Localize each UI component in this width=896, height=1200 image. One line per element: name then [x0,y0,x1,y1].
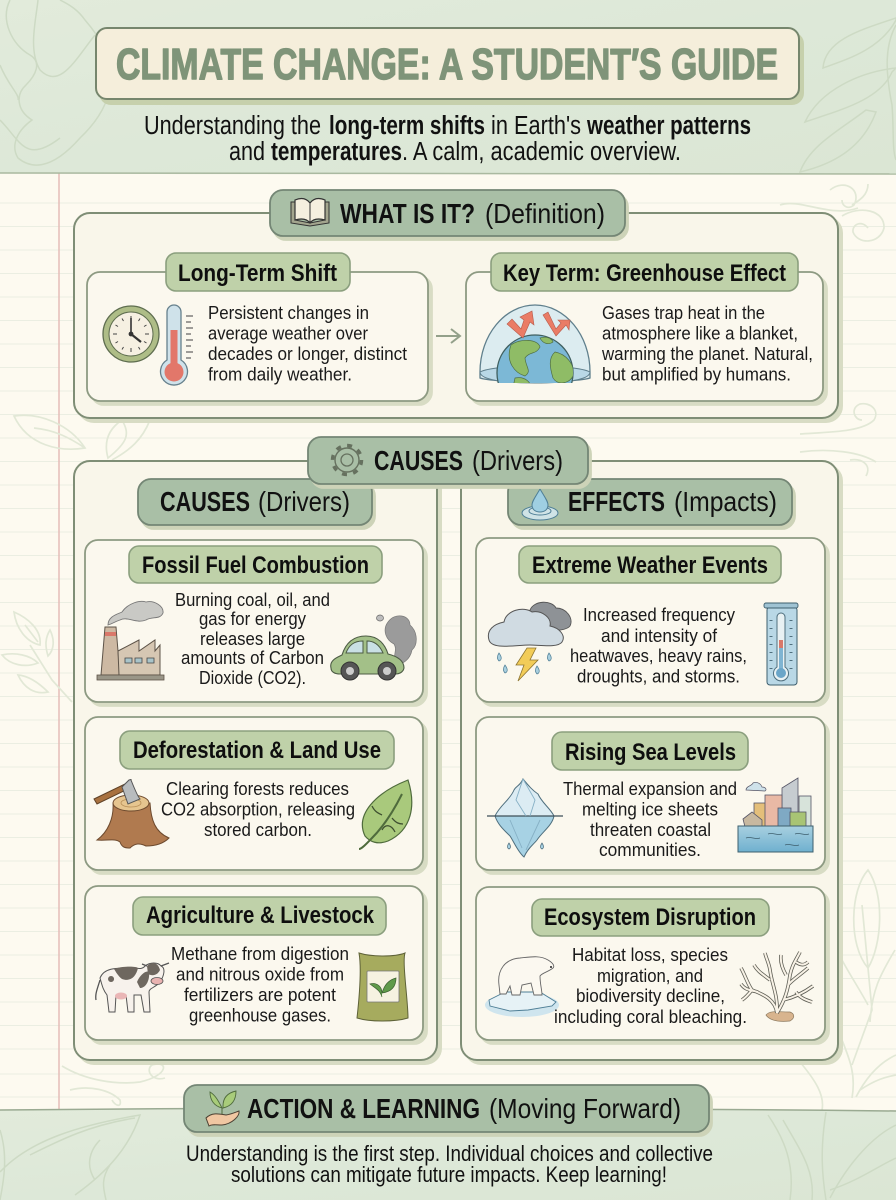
icon: sad leaf [359,780,412,849]
subtitle: . A calm, academic overview. [402,138,681,166]
text: long-term shift: Persistent changes in [208,302,369,323]
section heading: action and learning: ACTION & LEARNING [247,1093,480,1124]
subtitle: and [229,138,265,166]
card heading: long-term shift: Long-Term Shift [178,260,337,287]
text: rising sea levels: communities. [599,839,701,860]
section heading: action and learning: (Moving Forward) [489,1093,681,1124]
text: deforestation [161,778,355,840]
footer text: Understanding is the first step. Individual choices and collective [186,1141,713,1166]
text: ecosystem [554,944,747,1027]
text: ecosystem: migration, and [597,965,703,986]
section heading: what is it: WHAT IS IT? [340,198,475,229]
card heading: deforestation: Deforestation & Land Use [133,737,381,764]
text: rising sea levels: threaten coastal [590,819,711,840]
card heading: agriculture [133,897,386,935]
title box [96,28,799,99]
subtitle: temperatures [271,138,402,166]
card heading: rising sea levels [552,732,748,770]
subheading: causes: (Drivers) [258,486,350,517]
icon: iceberg [487,779,563,857]
section heading: what is it [270,190,625,236]
card: fossil fuel combustion [85,540,423,702]
subheading: effects: (Impacts) [674,486,777,517]
card heading: fossil fuel [129,546,382,583]
section heading: what is it: (Definition) [485,198,605,229]
text: greenhouse effect [601,302,813,384]
text: ecosystem: Habitat loss, species [572,944,728,965]
text: long-term shift: decades or longer, distinct [208,343,408,364]
card: deforestation [85,717,423,870]
text: rising sea levels: melting ice sheets [582,798,718,820]
icon: bleached coral [741,952,813,1021]
text: long-term shift: average weather over [208,322,368,344]
icon: car with exhaust [331,615,416,680]
text: greenhouse effect: atmosphere like a blanket, [602,322,798,344]
text: fossil fuel: amounts of Carbon [181,647,324,668]
text: fossil fuel: Dioxide (CO2). [199,667,306,688]
text: long-term shift [208,302,408,384]
text: deforestation: CO2 absorption, releasing [161,798,355,820]
icon: thermometer [160,305,193,385]
footer text [186,1141,713,1187]
subtitle: in Earth's [491,112,581,140]
subheading: causes: CAUSES [160,486,250,517]
card: rising sea levels [476,717,825,870]
card heading: long-term shift [166,253,350,291]
icon: storm cloud [488,602,571,681]
icon: open book [291,199,329,226]
icon: globe under dome [479,304,591,384]
margin line [58,0,60,1110]
panel: causes [74,461,437,1060]
icon: clock [103,306,159,362]
header band [0,0,896,174]
icon: fertilizer bag [357,953,408,1021]
card heading: rising sea levels: Rising Sea Levels [565,739,736,766]
text: fossil fuel [175,589,330,688]
card heading: extreme weather [519,546,781,583]
text: greenhouse effect: Gases trap heat in the [602,302,765,323]
text: deforestation: Clearing forests reduces [166,778,349,799]
icon: flooded city [738,778,813,852]
panel: what is it [74,190,838,418]
text: extreme weather: and intensity of [601,625,718,646]
text: agriculture [171,943,349,1026]
section heading: causes: CAUSES [374,445,463,476]
text: deforestation: stored carbon. [204,819,312,840]
icon: factory [97,601,164,680]
section heading: action and learning [184,1085,709,1132]
text: fossil fuel: gas for energy [199,608,307,629]
subtitle [144,112,751,166]
subheading: effects [508,479,792,525]
icon: polar bear on ice [485,957,559,1017]
card heading: greenhouse: Key Term: Greenhouse Effect [503,260,786,287]
card heading: agriculture: Agriculture & Livestock [146,902,375,929]
card: long-term shift [87,253,428,401]
text: agriculture: fertilizers are potent [184,984,337,1005]
text: rising sea levels: Thermal expansion and [563,778,737,799]
text: long-term shift: from daily weather. [208,364,352,384]
text: greenhouse effect: warming the planet. Natural, [601,343,813,364]
text: extreme weather: Increased frequency [583,604,736,625]
icon: water drop [522,489,558,520]
icon: gear [332,446,362,474]
icon: axe in stump [94,780,169,848]
card heading: extreme weather: Extreme Weather Events [532,552,768,579]
subheading: effects: EFFECTS [568,486,665,517]
icon: thermometer gauge [764,603,798,685]
text: rising sea levels [563,778,737,860]
card heading: deforestation [120,731,394,769]
subtitle: weather patterns [586,112,751,140]
footer text: solutions can mitigate future impacts. Keep learning! [231,1162,667,1187]
section heading: causes [308,437,588,484]
text: agriculture: Methane from digestion [171,943,349,964]
section heading: causes: (Drivers) [472,445,563,476]
text: ecosystem: biodiversity decline, [576,985,725,1006]
text: ecosystem: including coral bleaching. [554,1006,747,1027]
card heading: fossil fuel: Fossil Fuel Combustion [142,552,369,579]
icon: cow [96,963,169,1012]
card: ecosystem disruption [476,887,825,1040]
subtitle: long-term shifts [329,112,485,140]
text: extreme weather: droughts, and storms. [577,666,740,686]
card: agriculture [85,886,423,1040]
card heading: ecosystem: Ecosystem Disruption [544,904,756,931]
card: greenhouse effect [466,253,823,411]
icon: hand with sprout [206,1091,239,1126]
decorative paper flourishes [2,184,896,1110]
text: fossil fuel: releases large [200,628,305,649]
text: greenhouse effect: but amplified by humans. [602,364,791,384]
text: extreme weather: heatwaves, heavy rains, [570,645,747,666]
text: fossil fuel: Burning coal, oil, and [175,589,330,610]
card: extreme weather [476,538,825,702]
card heading: greenhouse [491,253,798,291]
text: agriculture: greenhouse gases. [189,1004,331,1026]
panel: effects [461,461,838,1060]
text: agriculture: and nitrous oxide from [176,964,344,984]
subtitle: Understanding the [144,112,321,140]
arrow [436,329,460,343]
subheading: causes [138,479,372,525]
card heading: ecosystem [532,899,769,936]
text: extreme weather [570,604,747,686]
footer band [0,1108,896,1200]
